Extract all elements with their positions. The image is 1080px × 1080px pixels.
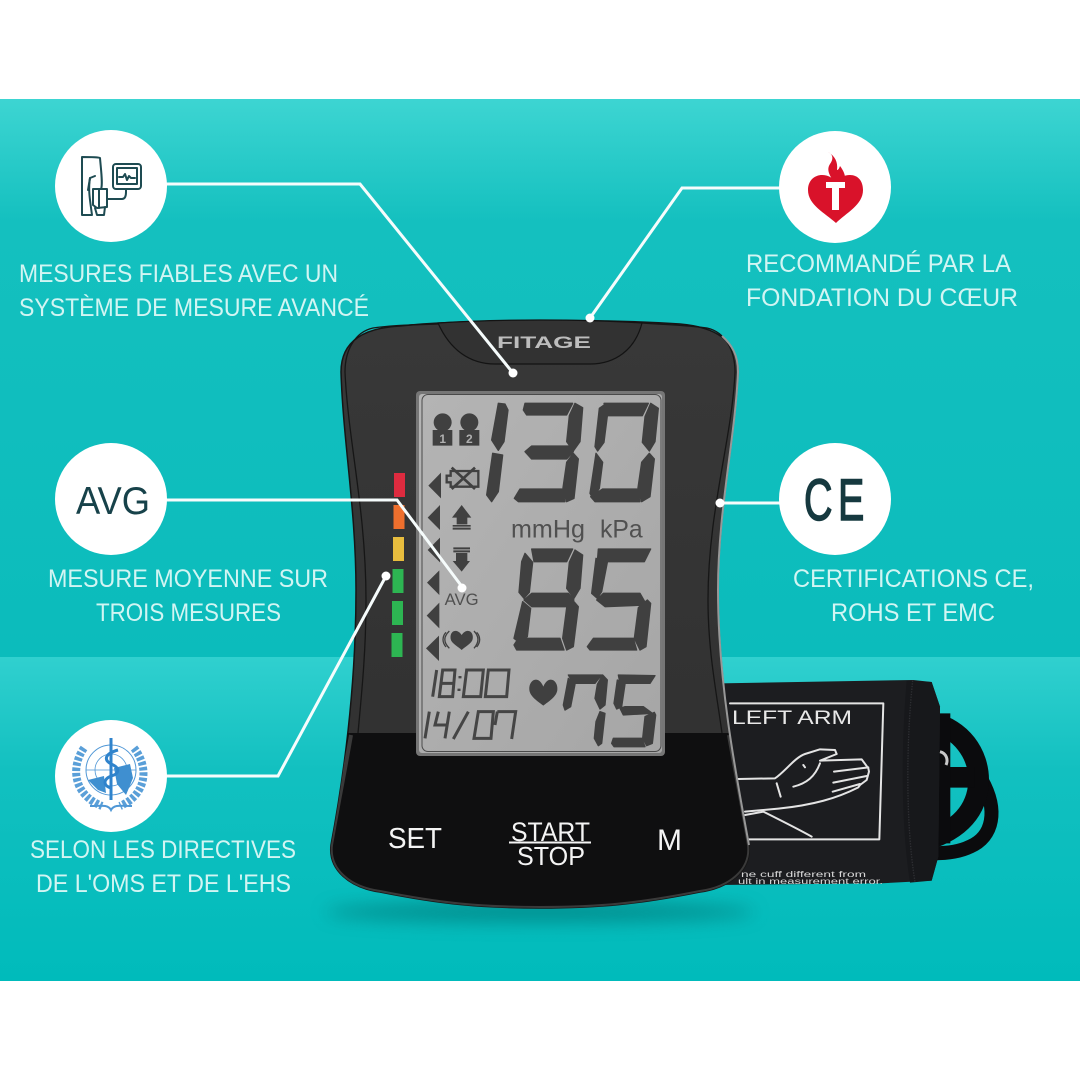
caption: average measurement: MESURE MOYENNE SUR <box>48 565 328 593</box>
icon: CE mark <box>779 443 891 555</box>
LCD screen <box>416 391 665 756</box>
product: blood pressure cuff <box>720 680 991 886</box>
cuff small print: ne cuff different from <box>741 870 867 879</box>
caption: certifications: ROHS ET EMC <box>831 599 995 627</box>
clock and date readout <box>425 670 516 739</box>
cuff label: LEFT ARM <box>732 708 852 729</box>
caption: average measurement: TROIS MESURES <box>96 599 281 627</box>
icon: WHO emblem <box>55 720 167 832</box>
brand notch with logo <box>438 320 642 364</box>
up arrow icon <box>452 505 471 530</box>
unit labels <box>511 515 643 543</box>
icon: CE mark: CE <box>804 467 864 533</box>
device buttons: STOP <box>517 841 585 871</box>
icon: arm cuff and monitor <box>55 130 167 242</box>
device buttons: SET <box>388 823 442 855</box>
caption: certifications: CERTIFICATIONS CE, <box>793 565 1034 593</box>
device shadow <box>325 902 755 922</box>
user icons: 2 <box>466 432 473 446</box>
pulse reading 75 <box>563 675 656 747</box>
caption: reliable measurements: SYSTÈME DE MESURE AVANCÉ <box>19 293 369 322</box>
caption: heart foundation: RECOMMANDÉ PAR LA <box>746 249 1011 278</box>
diastolic reading 85 <box>514 549 651 650</box>
pulse heart icon <box>443 631 480 650</box>
brand notch with logo: FITAGE <box>497 333 591 352</box>
user icons <box>433 413 479 446</box>
caption: heart foundation: FONDATION DU CŒUR <box>746 284 1018 312</box>
connector lines with dots <box>165 184 781 776</box>
caption: heart foundation <box>746 249 1018 312</box>
systolic reading 130 <box>487 403 658 502</box>
caption: WHO guidelines: SELON LES DIRECTIVES <box>30 836 296 864</box>
battery icon <box>447 468 478 489</box>
icon: AVG badge: AVG <box>76 480 150 523</box>
icon: heart foundation torch <box>779 131 891 243</box>
icon: AVG badge <box>55 443 167 555</box>
caption: average measurement <box>48 565 328 627</box>
cuff small print <box>738 870 883 886</box>
caption: reliable measurements <box>19 260 369 322</box>
product: monitor device <box>320 320 760 923</box>
device buttons: M <box>657 824 682 857</box>
caption: reliable measurements: MESURES FIABLES AVEC UN <box>19 260 338 288</box>
arrow indicators <box>426 473 441 661</box>
down arrow icon <box>453 547 470 572</box>
LED risk scale <box>392 473 405 657</box>
caption: WHO guidelines <box>30 836 296 898</box>
device buttons <box>388 817 682 871</box>
caption: certifications <box>793 565 1034 627</box>
unit labels: mmHg <box>511 515 585 543</box>
pulse heart <box>529 680 557 706</box>
AVG label: AVG <box>445 591 479 609</box>
device buttons: START <box>511 817 590 847</box>
unit labels: kPa <box>600 515 643 543</box>
cuff small print: ult in measurement error. <box>738 877 883 886</box>
user icons: 1 <box>439 432 446 446</box>
caption: WHO guidelines: DE L'OMS ET DE L'EHS <box>36 870 291 898</box>
